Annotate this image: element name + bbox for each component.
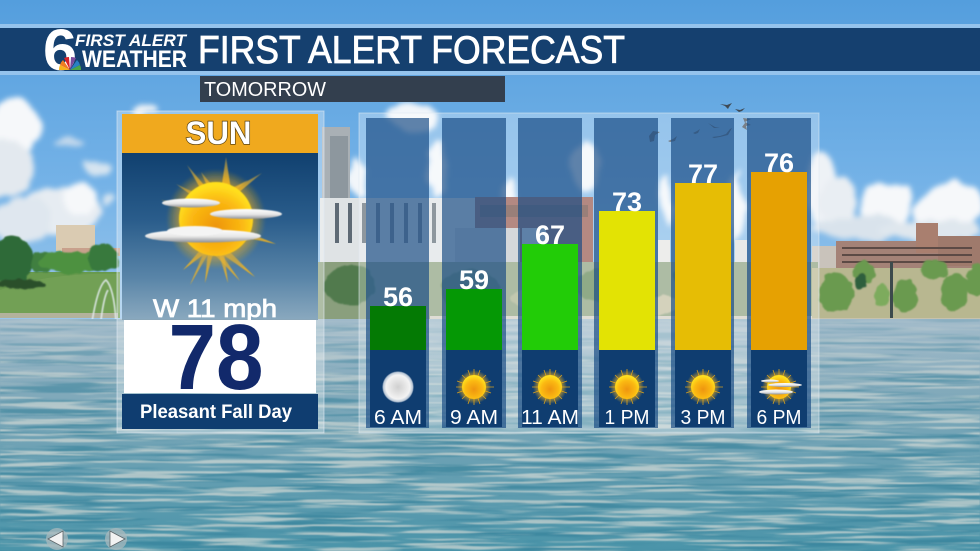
sky [0,0,980,330]
summary band [122,394,318,429]
column: 1 PM: 73 [612,187,642,217]
station logo [43,18,188,83]
column: 3 PM: 77 [688,159,718,189]
wind text: W 11 mph [153,295,277,323]
column: 6 PM: 6 PM [756,407,802,429]
column: 1 PM: 1 PM [604,407,650,429]
logo text: weather: WEATHER [82,46,187,73]
panel frame [117,111,324,433]
day label: SUN [186,115,252,151]
clouds centre [349,105,744,241]
NBC peacock [59,57,81,70]
logo text: first alert: FIRST ALERT [75,31,188,50]
high temperature: 78 [168,305,264,409]
column: 6 PM [747,118,811,429]
column: 9 AM [442,118,506,429]
water [0,319,980,551]
clouds left [0,102,159,246]
chart frame [359,113,819,433]
navigation arrows [46,528,127,550]
cloud [145,226,261,242]
column: 3 PM [671,118,734,429]
next arrow button [105,528,127,550]
column: 6 AM [366,118,429,429]
column: 11 AM [518,118,582,429]
panel: current day summary [117,111,324,433]
sky panel [122,153,318,320]
trees and shoreline right [812,260,980,321]
subtitle text: TOMORROW [204,79,326,101]
column: 9 AM: 59 [459,265,489,295]
column: 3 PM: 3 PM [680,407,726,429]
title: FIRST ALERT FORECAST [198,29,625,72]
icon: sun behind clouds [145,157,282,285]
previous arrow button [46,528,68,550]
column: 11 AM: 11 AM [521,407,579,429]
day band [122,114,318,153]
column: 11 AM: 67 [535,220,565,250]
header banner [0,18,980,83]
fountain [92,280,116,322]
high temperature box [124,320,316,393]
numeral 6: 6 [43,18,77,83]
column: 9 AM: 9 AM [450,407,498,429]
column: 6 AM: 6 AM [374,407,422,429]
summary text: Pleasant Fall Day [140,402,292,423]
trees and shoreline centre [318,261,820,320]
column: 1 PM [594,118,658,429]
column: 6 AM: 56 [383,282,413,312]
panel: hourly forecast bar chart [359,113,819,433]
trees and lawn left [0,236,120,318]
clouds right [808,147,980,242]
skyline buildings [56,127,980,275]
column: 6 PM: 76 [764,148,794,178]
cloud [210,209,282,219]
subtitle bar [200,76,505,102]
cloud [162,198,220,208]
birds [649,103,751,142]
